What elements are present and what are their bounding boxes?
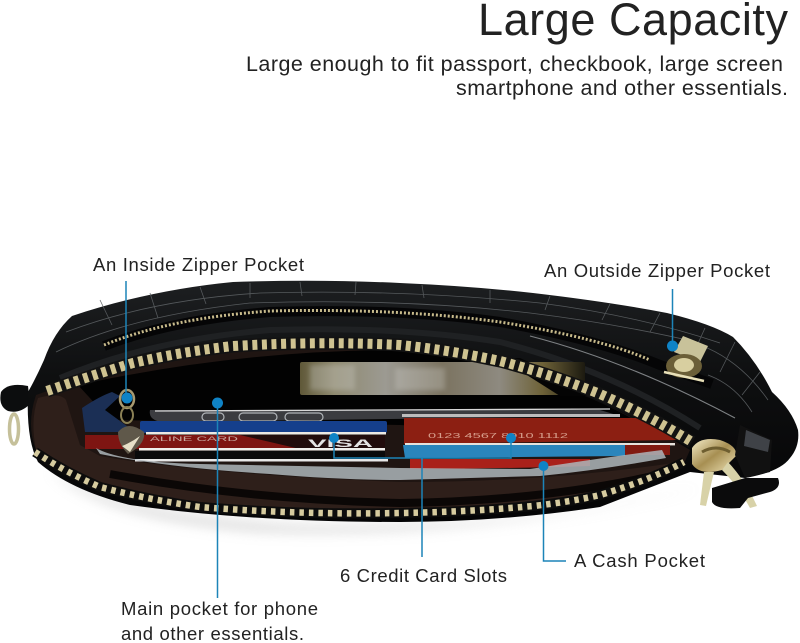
leather outer body [28, 281, 798, 522]
ground shadow [50, 470, 700, 533]
icon: inside zipper pull [118, 390, 144, 454]
right credit card stack: 0123 4567 8910 1112 [428, 433, 568, 440]
callout: 6 credit card slots [329, 433, 516, 586]
brown lining [31, 349, 690, 513]
main zipper teeth, lower [35, 452, 684, 513]
callout: an inside zipper pocket: An Inside Zipper Pocket [93, 254, 304, 275]
callout: 6 credit card slots: 6 Credit Card Slots [340, 565, 507, 586]
icon: dark blue item behind left pull [82, 392, 135, 432]
icon: wrist strap ring on left [0, 385, 30, 444]
icon: outside zipper pull [664, 336, 708, 381]
callout: an outside zipper pocket: An Outside Zipper Pocket [544, 260, 770, 281]
callout: an inside zipper pocket [93, 254, 304, 404]
black interior pocket [78, 350, 665, 440]
callout: a cash pocket [538, 461, 705, 571]
left credit card stack [85, 421, 388, 462]
product photo: open clutch bag [0, 281, 798, 533]
subtitle text: smartphone and other essentials. [456, 76, 788, 100]
leather flap highlight [60, 329, 700, 428]
phone edge with buttons [150, 409, 620, 422]
callout: main pocket: Main pocket for phone [121, 598, 318, 619]
callout: an outside zipper pocket [544, 260, 770, 352]
callout: a cash pocket: A Cash Pocket [574, 550, 705, 571]
left credit card stack: ALINE CARD [150, 437, 240, 443]
glitter item in pocket [300, 362, 585, 395]
main zipper teeth, upper [47, 343, 692, 442]
clear card sleeve [96, 448, 666, 480]
subtitle text: Large enough to fit passport, checkbook, large screen [246, 52, 783, 76]
outside zipper track [104, 311, 712, 384]
croc texture lines [56, 282, 768, 412]
callout: main pocket [121, 398, 318, 643]
left credit card stack: VISA [308, 438, 373, 450]
icon: main zipper pull with strap [692, 425, 779, 508]
subtitle text [246, 52, 788, 100]
right credit card stack [402, 414, 680, 469]
